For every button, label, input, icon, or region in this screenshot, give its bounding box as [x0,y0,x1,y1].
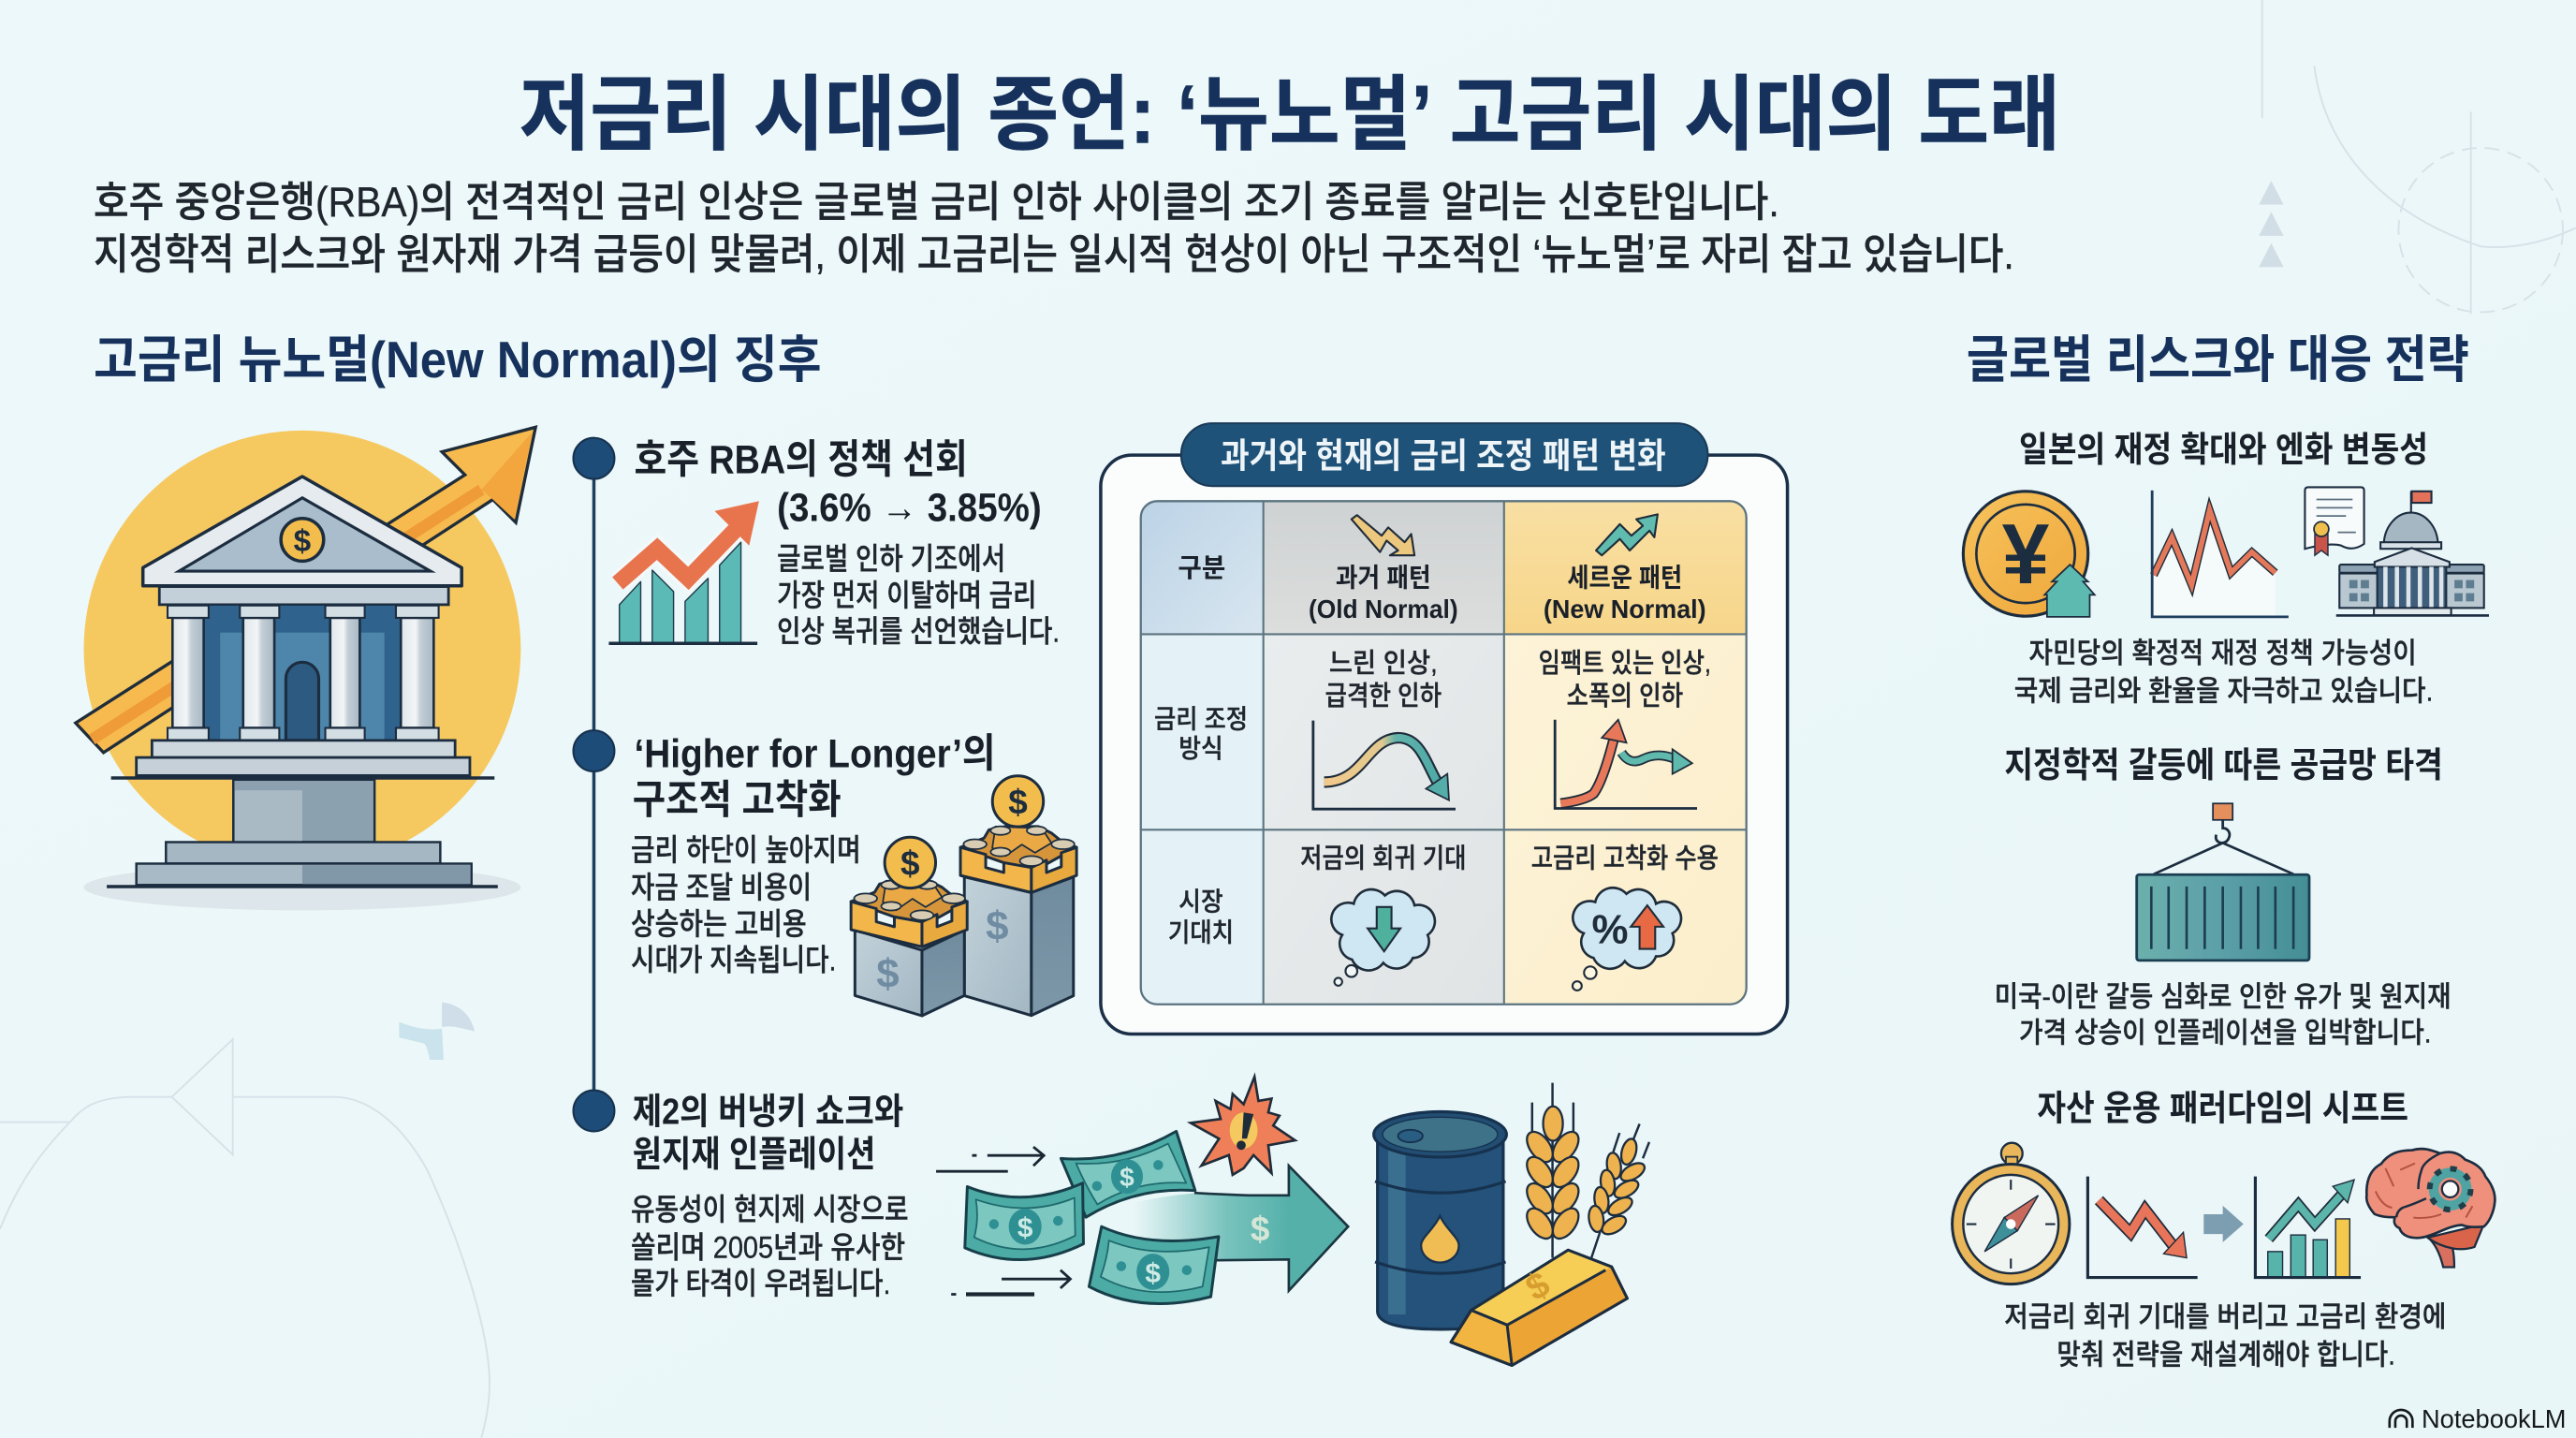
icon: thought cloud percent up: % [1591,906,1628,952]
item 2 text: 자금 조달 비용이 [631,871,812,904]
risk 3 text [2004,1300,2446,1372]
table header labels: 세르운 패턴 [1567,564,1682,593]
heading: global risk: 글로벌 리스크와 대응 전략 [1967,331,2469,389]
icon: gold bar [1451,1250,1627,1365]
item 2 text: 시대가 지속됩니다. [631,943,836,976]
rate adjustment cell text: 임팩트 있는 인상, [1539,649,1711,679]
icon: fortress towers with dollar coins: $ [986,903,1009,949]
item 1 text: 인상 복귀를 선언했습니다. [777,614,1060,648]
item 2 heading: 구조적 고착화 [633,778,842,823]
timeline item 1: RBA policy [608,437,1060,648]
panel header pill: 과거와 현재의 금리 조정 패턴 변화 [1221,437,1666,476]
row labels [1154,705,1248,947]
item 3 text: 쏠리며 2005년과 유사한 [631,1231,905,1265]
risk 2 text: 가격 상승이 인플레이션을 입박합니다. [2019,1017,2432,1049]
icon: certificate [2305,487,2364,555]
item 2 heading: ‘Higher for Longer’의 [634,732,996,777]
chart: volatile line [2152,491,2289,617]
icon: money flow arrow [936,1077,1348,1303]
intro text: 호주 중앙은행(RBA)의 전격적인 금리 인상은 글로벌 금리 인하 사이클의 조기 종료를 알리는 신호탄입니다. [94,179,1779,226]
item 3 heading: 원지재 인플레이션 [633,1135,875,1175]
icon: new pattern arrow [1596,514,1658,555]
rate adjustment cell text: 급격한 인하 [1325,682,1442,712]
icon: oil barrel [1374,1112,1506,1329]
risk 2 text: 미국-이란 갈등 심화로 인한 유가 및 원지재 [1995,980,2452,1013]
item 1 text [777,542,1060,648]
short tower crown [851,881,967,946]
panel: rate pattern comparison [1101,423,1788,1034]
rate adjustment cell text: 소폭의 인하 [1566,682,1683,712]
risk 3 text: 맞춰 전략을 재설계해야 합니다. [2056,1339,2395,1372]
comparison table [1141,501,1747,1005]
icon: explosion alert [1191,1077,1295,1175]
banknotes: $ [1145,1258,1161,1289]
risk 2 text [1995,980,2452,1049]
item 1 text: 가장 먼저 이탈하며 금리 [777,579,1036,612]
illustration: central bank with rising arrow: $ [294,524,312,559]
icon: fortress towers with dollar coins: $ [876,951,900,997]
table header labels: (Old Normal) [1309,594,1458,624]
risk 1 heading: 일본의 재정 확대와 엔화 변동성 [2019,430,2428,469]
panel header pill [1181,423,1707,486]
illustration: central bank with rising arrow [76,427,535,910]
item 3 text [631,1193,909,1300]
item 1 heading: (3.6% → 3.85%) [777,485,1042,530]
chart: old pattern curve [1313,721,1456,809]
item 3 heading: 제2의 버냉키 쇼크와 [633,1092,903,1132]
row labels: 방식 [1178,734,1223,763]
icon: old pattern arrow [1352,515,1414,555]
arrow: transition [2203,1206,2244,1242]
title: 저금리 시대의 종언: ‘뉴노멀’ 고금리 시대의 도래 [520,69,2060,161]
icon: fortress towers with dollar coins: $ [900,844,920,883]
item 1 heading [634,437,1042,530]
icon: yen coin: ¥ [2002,506,2050,602]
icon: thought cloud percent up [1573,888,1681,990]
timeline [574,438,614,1131]
heading: new normal signs: 고금리 뉴노멀(New Normal)의 징후 [94,331,822,389]
intro text: 지정학적 리스크와 원자재 가격 급등이 맞물려, 이제 고금리는 일시적 현상이 아닌 구조적인 ‘뉴노멀’로 자리 잡고 있습니다. [94,231,2014,278]
table header labels: 구분 [1178,553,1225,582]
chart: falling line [2087,1177,2198,1278]
icon: gold bar: $ [1519,1264,1557,1309]
rate adjustment cell text: 느린 인상, [1329,649,1438,679]
risk 1: Japan [1963,430,2489,708]
icon: brain with gear [2366,1149,2495,1268]
tall tower crown [960,827,1076,892]
icon: compass [1953,1143,2070,1284]
risk 3: asset paradigm [1953,1089,2495,1372]
item 2 text [631,833,861,976]
intro text [94,179,2014,278]
icon: money flow arrow: $ [1251,1210,1269,1248]
item 1 heading: 호주 RBA의 정책 선회 [634,437,968,482]
table header labels: (New Normal) [1544,594,1706,624]
row labels: 시장 [1178,887,1223,916]
banknotes: $ [1120,1163,1134,1192]
item 2 text: 금리 하단이 높아지며 [631,833,861,867]
item 3 text: 몰가 타격이 우려됩니다. [631,1267,890,1300]
icon: bar chart with rising arrow [608,501,759,643]
row labels: 기대치 [1168,918,1234,947]
rate adjustment cell text: 저금의 회귀 기대 [1300,844,1466,874]
risk 2 heading: 지정학적 갈등에 따른 공급망 타격 [2004,745,2443,785]
icon: yen coin [1963,492,2095,617]
icon: thought cloud down arrow [1331,889,1435,986]
item 1 text: 글로벌 인하 기조에서 [777,542,1005,576]
timeline item 2: higher for longer [631,732,1076,1016]
icon: wheat [1522,1083,1649,1258]
risk 1 text: 국제 금리와 환율을 자극하고 있습니다. [2014,675,2433,708]
chart: rising bars and arrow [2255,1177,2361,1278]
table header labels [1178,553,1706,624]
rate adjustment cell text: 고금리 고착화 수용 [1531,844,1719,874]
NotebookLM logo: NotebookLM [2422,1404,2566,1433]
item 2 text: 상승하는 고비용 [631,907,807,941]
timeline item 3: Bernanke shock [631,423,2566,1433]
risk 1 text [2014,637,2433,708]
risk 3 heading: 자산 운용 패러다임의 시프트 [2037,1089,2408,1128]
icon: fortress towers with dollar coins: $ [1008,783,1028,821]
icon: fortress towers with dollar coins [851,776,1076,1016]
chart: new pattern curve [1555,720,1697,809]
rate adjustment cell text [1300,649,1719,874]
item 2 heading [633,732,996,823]
item 3 text: 유동성이 현지제 시장으로 [631,1193,909,1226]
row labels: 금리 조정 [1154,705,1248,734]
risk 2: geopolitics [1995,745,2452,1049]
icon: government building [2336,492,2489,615]
item 3 heading [633,1092,903,1175]
table header labels: 과거 패턴 [1336,564,1431,593]
risk 3 text: 저금리 회귀 기대를 버리고 고금리 환경에 [2004,1300,2446,1333]
icon: container on hook [2137,803,2309,961]
banknotes [965,1131,1219,1303]
banknotes: $ [1017,1213,1033,1244]
risk 1 text: 자민당의 확정적 재정 정책 가능성이 [2029,637,2417,669]
